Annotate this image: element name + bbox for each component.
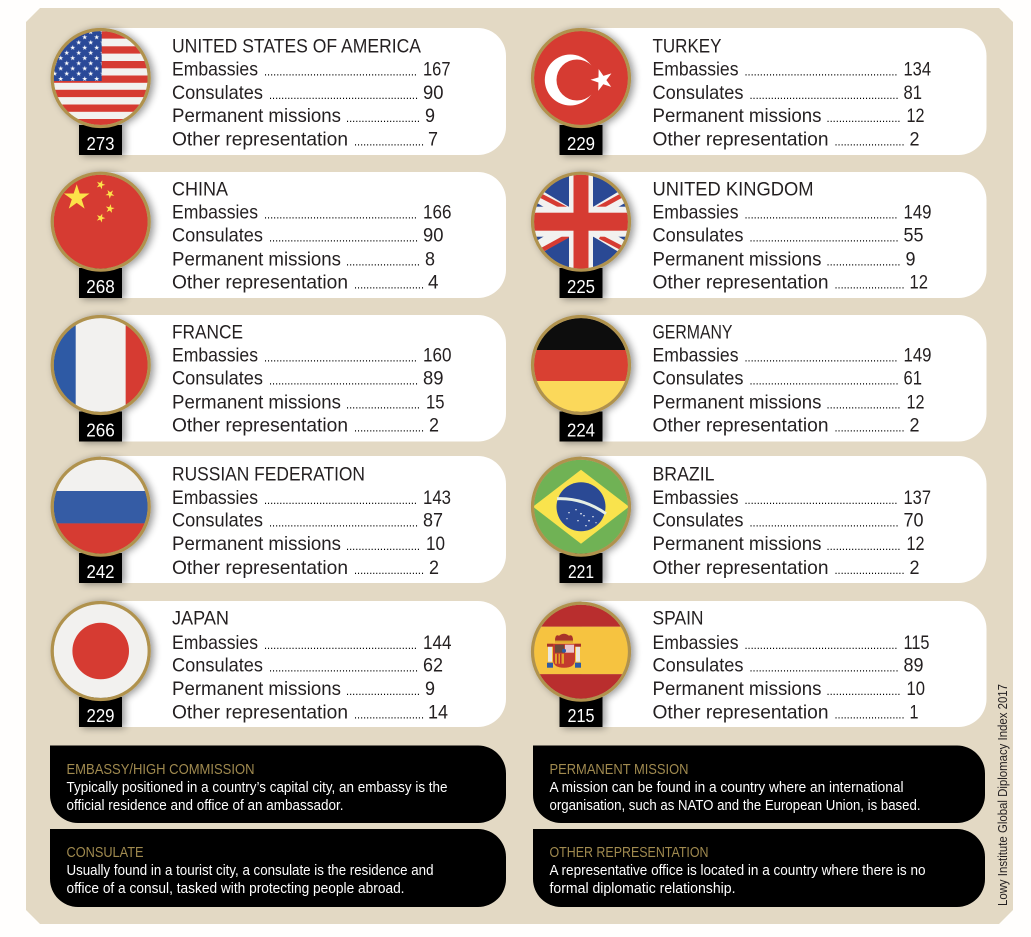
country data: USA: .................................................. (264, 65, 417, 79)
country data: Brazil: ................................................. (750, 516, 898, 530)
country data: Turkey: .................................................. (744, 65, 898, 79)
country data: United Kingdom: 149 (904, 202, 932, 224)
country data: Germany: 2 (910, 415, 920, 437)
badge: Japan flag and total: 229 (86, 706, 114, 726)
country data: Spain: 89 (904, 655, 924, 677)
country data: France (172, 322, 452, 437)
country data: Russian Federation: 87 (423, 510, 443, 532)
definition: consulate: Usually found in a tourist city, a consulate is the residence and (66, 862, 434, 879)
country data: Germany: ................................................. (750, 374, 898, 388)
country data: USA: UNITED STATES OF AMERICA (172, 36, 421, 58)
country data: Brazil (652, 464, 931, 579)
badge: France flag and total: 266 (86, 420, 115, 440)
country data: Brazil: Embassies (652, 487, 739, 509)
panel: Japan (52, 601, 506, 727)
country data: United Kingdom: Consulates (652, 225, 744, 247)
country data: Russian Federation: RUSSIAN FEDERATION (172, 464, 365, 486)
country data: USA (172, 36, 450, 151)
country data: Germany: ........................ (826, 398, 900, 412)
country data: Brazil: 12 (906, 533, 924, 555)
country data: Japan: ....................... (354, 707, 424, 721)
country data: Germany: 12 (906, 392, 924, 414)
country data: Russian Federation: Permanent missions (172, 533, 341, 555)
definition: permanent mission: A mission can be found in a country where an international (550, 779, 904, 796)
country data: Germany: 149 (904, 345, 932, 367)
source credit: Lowy Institute Global Diplomacy Index 2017 (995, 684, 1010, 906)
definition: embassy / high commission: official residence and office of an ambassador. (66, 797, 344, 814)
country data: Spain: Consulates (652, 655, 744, 677)
country data: Japan: Permanent missions (172, 678, 341, 700)
definition: consulate (50, 829, 506, 907)
country data: United Kingdom: 55 (904, 225, 924, 247)
country data: United Kingdom: Other representation (652, 272, 828, 294)
country data: USA: Consulates (172, 82, 263, 104)
country data: USA: 7 (428, 129, 438, 151)
country data: United Kingdom: 12 (910, 272, 928, 294)
country data: Germany: Consulates (652, 368, 744, 390)
country data: China: Consulates (172, 225, 263, 247)
country data: Japan: Consulates (172, 655, 263, 677)
definition: other representation: formal diplomatic relationship. (550, 880, 736, 897)
country data: United Kingdom (652, 178, 932, 294)
country data: France: ........................ (346, 398, 420, 412)
country data: Japan: 62 (423, 655, 443, 677)
country data: China: CHINA (172, 178, 228, 200)
country data: Germany: Permanent missions (652, 392, 822, 414)
country data: Brazil: ....................... (834, 563, 904, 577)
definition: embassy / high commission (50, 746, 506, 823)
badge: Germany flag and total (532, 316, 630, 442)
country data: Brazil: BRAZIL (652, 464, 715, 486)
country data: Turkey (652, 36, 931, 151)
country data: Turkey: 81 (904, 82, 922, 104)
country data: Japan: 144 (423, 632, 452, 654)
badge: Brazil flag and total: 221 (568, 562, 594, 582)
country data: Japan (172, 607, 452, 723)
definition: consulate: CONSULATE (66, 844, 144, 861)
country data: USA: 167 (423, 59, 450, 81)
country data: Spain: .................................................. (744, 638, 898, 652)
country data: China: Other representation (172, 272, 348, 294)
country data: China: 4 (428, 272, 439, 294)
country data: France: 160 (423, 345, 452, 367)
country data: China: 90 (423, 225, 444, 247)
country data: China: 8 (425, 249, 435, 271)
country data: Russian Federation: .................................................. (264, 493, 417, 507)
country data: Turkey: ................................................. (750, 88, 898, 102)
country data: Turkey: TURKEY (652, 36, 722, 58)
country data: Turkey: Permanent missions (652, 105, 822, 127)
badge: USA flag and total (52, 30, 149, 155)
country data: Turkey: ....................... (834, 135, 904, 149)
badge: Japan flag and total (52, 602, 149, 727)
country data: Japan: 9 (425, 678, 435, 700)
country data: Japan: Other representation (172, 701, 348, 723)
country data: USA: 90 (423, 82, 444, 104)
badge: Turkey flag and total: 229 (567, 134, 595, 154)
country data: Spain: 1 (910, 701, 918, 723)
country data: Germany (652, 322, 932, 437)
country data: Turkey: Other representation (652, 129, 828, 151)
country data: United Kingdom: ....................... (834, 278, 904, 292)
definition: embassy / high commission: Typically positioned in a country’s capital city, an embassy is the (66, 779, 448, 796)
country data: Spain: Embassies (652, 632, 739, 654)
country data: Spain: ........................ (826, 684, 900, 698)
definition: embassy / high commission: EMBASSY/HIGH COMMISSION (66, 761, 254, 778)
country data: Spain: ................................................. (750, 661, 898, 675)
country data: United Kingdom: Embassies (652, 202, 739, 224)
panel: United States of America (52, 28, 506, 155)
country data: Japan: .................................................. (264, 638, 417, 652)
panel: Spain (532, 601, 986, 727)
country data: France: FRANCE (172, 322, 243, 344)
country data: Russian Federation: 2 (429, 557, 439, 579)
country data: Russian Federation: Other representation (172, 557, 348, 579)
country data: Spain (652, 607, 930, 723)
definition: permanent mission: organisation, such as NATO and the European Union, is based. (550, 797, 920, 814)
panel: Brazil (532, 456, 986, 583)
country data: Japan: ........................ (346, 684, 420, 698)
country data: France: 2 (429, 415, 439, 437)
country data: China: Embassies (172, 202, 258, 224)
country data: USA: Permanent missions (172, 105, 341, 127)
definition: other representation: OTHER REPRESENTATION (550, 844, 708, 861)
country data: Japan: Embassies (172, 632, 258, 654)
country data: Germany: .................................................. (744, 351, 898, 365)
country data: Russian Federation: ....................... (354, 563, 424, 577)
country data: United Kingdom: 9 (906, 249, 916, 271)
country data: China: ....................... (354, 278, 424, 292)
country data: France: Embassies (172, 345, 258, 367)
country data: France: 15 (426, 392, 445, 414)
country data: Spain: Permanent missions (652, 678, 822, 700)
country data: USA: ................................................. (269, 88, 418, 102)
badge: China flag and total: 268 (86, 277, 115, 297)
country data: USA: Embassies (172, 59, 258, 81)
country data: Germany: Embassies (652, 345, 739, 367)
country data: France: ....................... (354, 421, 424, 435)
definition: permanent mission (533, 746, 985, 823)
country data: USA: ....................... (354, 135, 424, 149)
country data: France: Consulates (172, 368, 263, 390)
country data: Russian Federation: ................................................. (269, 516, 418, 530)
panel: Germany (532, 315, 986, 442)
country data: Germany: 61 (904, 368, 922, 390)
country data: Russian Federation: 143 (423, 487, 451, 509)
country data: China (172, 178, 452, 294)
definition: other representation: A representative office is located in a country where there is no (550, 862, 926, 879)
country data: Turkey: 2 (910, 129, 920, 151)
panel: Russian Federation (52, 456, 506, 583)
country data: Brazil: ........................ (826, 539, 900, 553)
country data: USA: 9 (425, 105, 435, 127)
country data: China: Permanent missions (172, 249, 341, 271)
country data: France: ................................................. (269, 374, 418, 388)
country data: China: ........................ (346, 255, 420, 269)
panel: China (52, 172, 506, 298)
badge: France flag and total (52, 316, 150, 442)
country data: Russian Federation: 10 (426, 533, 445, 555)
country data: Turkey: 134 (904, 59, 931, 81)
country data: Brazil: Other representation (652, 557, 828, 579)
icon: coat of arms (547, 634, 581, 668)
country data: USA: Other representation (172, 129, 348, 151)
definition: other representation (533, 829, 985, 907)
country data: Turkey: Embassies (652, 59, 739, 81)
country data: Germany: Other representation (652, 415, 828, 437)
country data: Spain: Other representation (652, 701, 828, 723)
country data: France: Permanent missions (172, 392, 341, 414)
country data: China: 166 (423, 202, 452, 224)
badge: China flag and total (52, 173, 149, 298)
country data: Turkey: 12 (906, 105, 924, 127)
country data: France: 89 (423, 368, 444, 390)
badge: UK flag and total: 225 (567, 277, 595, 297)
definition: permanent mission: PERMANENT MISSION (550, 761, 688, 778)
country data: Germany: ....................... (834, 421, 904, 435)
country data: Japan: 14 (428, 701, 448, 723)
country data: Japan: JAPAN (172, 607, 229, 629)
country data: China: ................................................. (269, 231, 418, 245)
badge: USA flag and total: 273 (86, 134, 114, 154)
country data: Spain: ....................... (834, 707, 904, 721)
country data: Brazil: .................................................. (744, 493, 898, 507)
country data: Russian Federation: Consulates (172, 510, 263, 532)
panel: United Kingdom (511, 172, 986, 298)
badge: Russia flag and total: 242 (86, 562, 114, 582)
country data: Brazil: 137 (904, 487, 931, 509)
country data: Germany: GERMANY (652, 322, 732, 344)
country data: Russian Federation: ........................ (346, 539, 420, 553)
country data: United Kingdom: ................................................. (750, 231, 898, 245)
country data: Spain: SPAIN (652, 607, 704, 629)
badge: Spain flag and total: 215 (568, 706, 594, 726)
country data: United Kingdom: ........................ (826, 255, 900, 269)
country data: Spain: 10 (906, 678, 925, 700)
country data: Brazil: Consulates (652, 510, 744, 532)
badge: Brazil flag and total (532, 458, 630, 583)
country data: China: .................................................. (264, 208, 417, 222)
country data: United Kingdom: Permanent missions (652, 249, 822, 271)
country data: Turkey: ........................ (826, 111, 900, 125)
country data: Turkey: Consulates (652, 82, 744, 104)
country data: United Kingdom: UNITED KINGDOM (652, 178, 814, 200)
panel: Turkey (532, 28, 986, 155)
definition: consulate: office of a consul, tasked with protecting people abroad. (66, 880, 404, 897)
country data: Spain: 115 (904, 632, 930, 654)
country data: Russian Federation (172, 464, 451, 579)
country data: USA: ........................ (346, 111, 420, 125)
country data: United Kingdom: .................................................. (744, 208, 898, 222)
country data: Brazil: 70 (904, 510, 924, 532)
badge: Turkey flag and total (532, 30, 630, 155)
badge: UK flag and total (529, 168, 639, 304)
country data: France: Other representation (172, 415, 348, 437)
panel: France (52, 315, 506, 442)
country data: Japan: ................................................. (269, 661, 418, 675)
country data: Brazil: Permanent missions (652, 533, 822, 555)
badge: Spain flag and total (532, 603, 630, 727)
badge: Germany flag and total: 224 (567, 420, 595, 440)
country data: France: .................................................. (264, 351, 417, 365)
badge: Russia flag and total (52, 458, 149, 583)
country data: Brazil: 2 (910, 557, 920, 579)
country data: Russian Federation: Embassies (172, 487, 258, 509)
